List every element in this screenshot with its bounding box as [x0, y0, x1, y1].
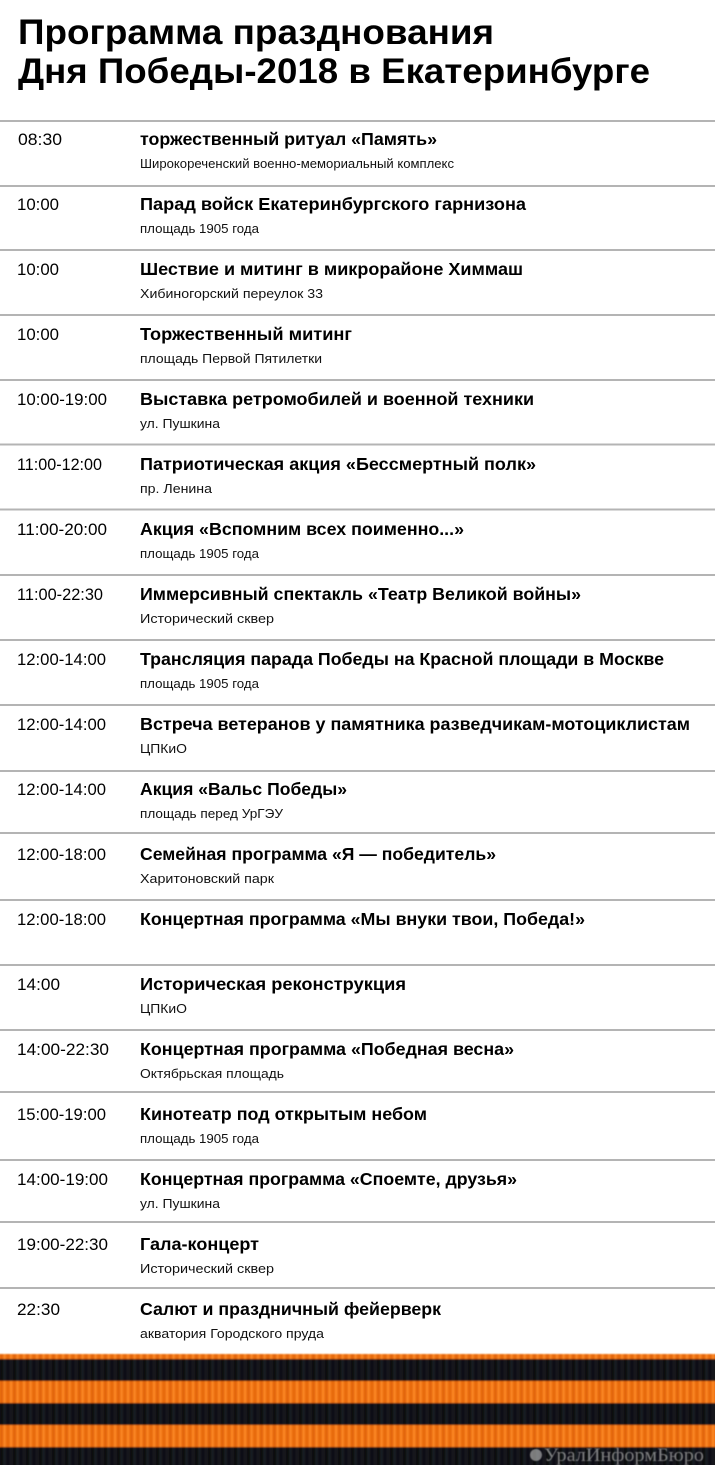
title	[18, 13, 650, 91]
event: 14:00 историческая реконструкция: Историческая реконструкция	[140, 974, 406, 994]
event: 19:00-22:30 гала-концерт: 19:00-22:30	[17, 1235, 108, 1254]
event: 12:00-18:00 семейная программа: Семейная программа «Я — победитель»	[140, 844, 496, 864]
event: 14:00-19:00 споемте, друзья	[17, 1169, 517, 1211]
event: 19:00-22:30 гала-концерт: Исторический сквер	[140, 1261, 274, 1276]
event: 19:00-22:30 гала-концерт	[17, 1234, 274, 1276]
event: 10:00 шествие и митинг	[17, 259, 523, 301]
event: 14:00-22:30 победная весна: 14:00-22:30	[17, 1040, 109, 1059]
event: 14:00-22:30 победная весна: Концертная программа «Победная весна»	[140, 1039, 514, 1059]
title: Программа празднования	[18, 13, 494, 52]
event: 12:00-14:00 трансляция парада: площадь 1905 года	[140, 676, 260, 691]
event: 22:30 салют: 22:30	[17, 1300, 60, 1319]
event: 14:00-22:30 победная весна: Октябрьская площадь	[140, 1066, 284, 1081]
event: 15:00-19:00 кинотеатр: 15:00-19:00	[17, 1105, 106, 1124]
event: 08:30 ритуал Память: Широкореченский военно-мемориальный комплекс	[140, 156, 455, 171]
georgian ribbon	[0, 1354, 715, 1465]
event: 12:00-18:00 семейная программа: 12:00-18:00	[17, 845, 106, 864]
event: 11:00-20:00 вспомним всех: 11:00-20:00	[17, 520, 107, 539]
event: 22:30 салют: Салют и праздничный фейерверк	[140, 1299, 441, 1319]
event: 12:00-14:00 вальс победы: 12:00-14:00	[17, 780, 106, 799]
event: 11:00-22:30 театр великой войны: Иммерсивный спектакль «Театр Великой войны»	[140, 584, 581, 604]
event: 11:00-12:00 бессмертный полк: Патриотическая акция «Бессмертный полк»	[140, 454, 536, 474]
event: 11:00-22:30 театр великой войны: 11:00-22:30	[17, 585, 103, 604]
event: 10:00 парад войск: 10:00	[17, 195, 59, 214]
event: 11:00-12:00 бессмертный полк	[17, 454, 536, 496]
event: 10:00 шествие и митинг: Шествие и митинг в микрорайоне Химмаш	[140, 259, 523, 279]
event: 14:00-19:00 споемте, друзья: Концертная программа «Споемте, друзья»	[140, 1169, 517, 1189]
event: 12:00-14:00 встреча ветеранов: 12:00-14:00	[17, 715, 106, 734]
event: 11:00-12:00 бессмертный полк: пр. Ленина	[140, 481, 213, 496]
event: 15:00-19:00 кинотеатр	[17, 1104, 427, 1146]
event: 10:00-19:00 выставка	[17, 389, 534, 431]
event: 12:00-14:00 встреча ветеранов: ЦПКиО	[140, 741, 187, 756]
event: 10:00 торжественный митинг: площадь Первой Пятилетки	[140, 351, 322, 366]
event: 12:00-14:00 вальс победы: Акция «Вальс Победы»	[140, 779, 347, 799]
event: 11:00-22:30 театр великой войны	[17, 584, 581, 626]
event: 10:00-19:00 выставка: Выставка ретромобилей и военной техники	[140, 389, 534, 409]
event: 10:00 парад войск: площадь 1905 года	[140, 221, 260, 236]
event: 12:00-14:00 вальс победы	[17, 779, 347, 821]
event: 08:30 ритуал Память	[18, 129, 455, 171]
event: 08:30 ритуал Память: 08:30	[18, 130, 62, 149]
event: 12:00-14:00 встреча ветеранов: Встреча ветеранов у памятника разведчикам-мотоциклистам	[140, 714, 690, 734]
event: 15:00-19:00 кинотеатр: Кинотеатр под открытым небом	[140, 1104, 427, 1124]
event: 12:00-14:00 встреча ветеранов	[17, 714, 690, 756]
event: 10:00 шествие и митинг: Хибиногорский переулок 33	[140, 286, 323, 301]
event: 10:00 торжественный митинг: Торжественный митинг	[140, 324, 352, 344]
event: 12:00-18:00 мы внуки твои: Концертная программа «Мы внуки твои, Победа!»	[140, 909, 585, 929]
event: 10:00 торжественный митинг: 10:00	[17, 325, 59, 344]
event: 11:00-22:30 театр великой войны: Исторический сквер	[140, 611, 274, 626]
event: 14:00 историческая реконструкция: ЦПКиО	[140, 1001, 187, 1016]
event: 14:00-19:00 споемте, друзья: ул. Пушкина	[140, 1196, 221, 1211]
event: 10:00 парад войск	[17, 194, 526, 236]
event: 22:30 салют: акватория Городского пруда	[140, 1326, 325, 1341]
event: 11:00-20:00 вспомним всех	[17, 519, 464, 561]
event: 22:30 салют	[17, 1299, 441, 1341]
title: Дня Победы-2018 в Екатеринбурге	[18, 52, 650, 91]
event: 12:00-18:00 мы внуки твои: 12:00-18:00	[17, 910, 106, 929]
event: 15:00-19:00 кинотеатр: площадь 1905 года	[140, 1131, 260, 1146]
event: 12:00-14:00 вальс победы: площадь перед УрГЭУ	[140, 806, 284, 821]
event: 12:00-14:00 трансляция парада: Трансляция парада Победы на Красной площади в Москве	[140, 649, 664, 669]
event: 11:00-20:00 вспомним всех: Акция «Вспомним всех поименно...»	[140, 519, 464, 539]
event: 10:00-19:00 выставка: 10:00-19:00	[17, 390, 107, 409]
event: 14:00-22:30 победная весна	[17, 1039, 514, 1081]
event: 14:00-19:00 споемте, друзья: 14:00-19:00	[17, 1170, 108, 1189]
event: 14:00 историческая реконструкция	[17, 974, 406, 1016]
event: 14:00 историческая реконструкция: 14:00	[17, 975, 60, 994]
event: 12:00-14:00 трансляция парада	[17, 649, 664, 691]
event: 11:00-20:00 вспомним всех: площадь 1905 года	[140, 546, 260, 561]
event: 11:00-12:00 бессмертный полк: 11:00-12:00	[17, 455, 102, 474]
event: 10:00 торжественный митинг	[17, 324, 352, 366]
event: 12:00-18:00 семейная программа	[17, 844, 496, 886]
event: 08:30 ритуал Память: торжественный ритуал «Память»	[140, 129, 437, 149]
event: 12:00-18:00 семейная программа: Харитоновский парк	[140, 871, 274, 886]
event: 12:00-14:00 трансляция парада: 12:00-14:00	[17, 650, 106, 669]
event: 10:00 парад войск: Парад войск Екатеринбургского гарнизона	[140, 194, 526, 214]
event: 19:00-22:30 гала-концерт: Гала-концерт	[140, 1234, 259, 1254]
event: 10:00 шествие и митинг: 10:00	[17, 260, 59, 279]
event: 10:00-19:00 выставка: ул. Пушкина	[140, 416, 221, 431]
